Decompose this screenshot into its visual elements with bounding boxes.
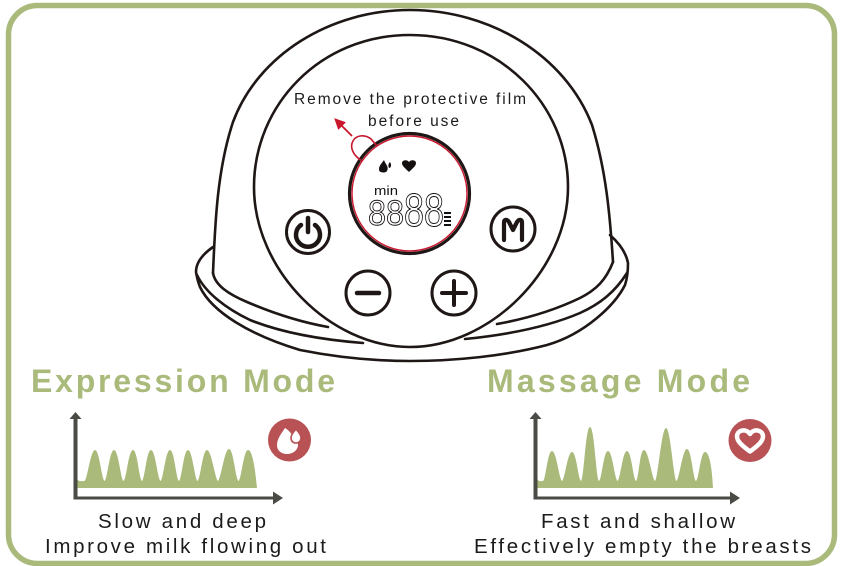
device face ring <box>254 35 568 347</box>
device dome <box>213 10 613 273</box>
caption: expression mode <box>45 510 326 558</box>
display: large digits: 88 <box>404 184 444 236</box>
chart axes <box>70 412 283 504</box>
caption: massage mode: Fast and shallow <box>541 510 735 533</box>
display: heart icon <box>402 160 416 172</box>
device base flange <box>196 235 628 361</box>
chart: massage waveform <box>530 412 740 504</box>
caption: expression mode: Slow and deep <box>98 510 266 533</box>
chart axes <box>530 412 740 504</box>
protective film outline <box>352 136 467 251</box>
caption: massage mode: Effectively empty the breasts <box>474 535 811 558</box>
display: level bars <box>444 213 451 225</box>
display ring <box>350 134 470 254</box>
display: min label: min <box>374 183 398 198</box>
red film tab and arrow <box>335 119 377 161</box>
icon: milk drops badge <box>268 418 311 462</box>
heading: Massage Mode: Massage Mode <box>487 363 750 399</box>
mode button <box>491 207 535 251</box>
device illustration <box>196 10 628 361</box>
display: milk drop icon <box>379 160 391 172</box>
plus button <box>432 271 476 315</box>
notice text <box>294 91 526 130</box>
notice text: Remove the protective film <box>294 91 526 108</box>
minus button <box>346 271 390 315</box>
icon: heart badge <box>728 419 772 462</box>
power button <box>286 210 330 254</box>
chart: expression waveform <box>70 412 283 504</box>
caption: expression mode: Improve milk flowing out <box>45 535 326 558</box>
notice text: before use <box>368 113 459 130</box>
display: small digits: 88 <box>368 194 404 233</box>
heading: Expression Mode: Expression Mode <box>31 363 335 399</box>
caption: massage mode <box>474 510 811 558</box>
